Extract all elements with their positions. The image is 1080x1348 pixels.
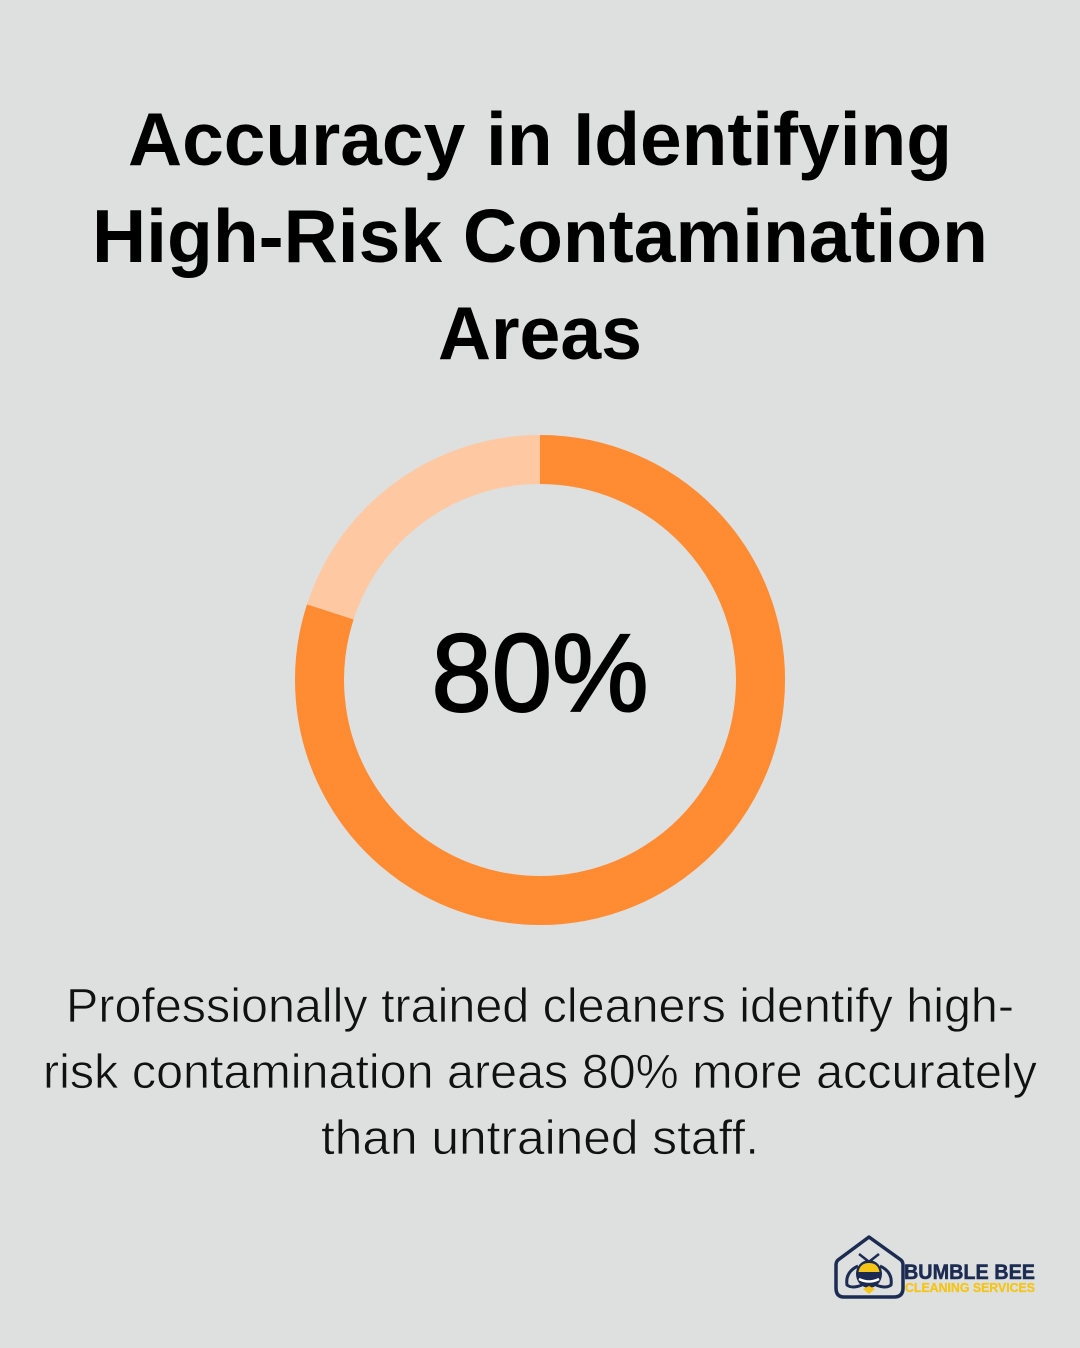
center value: 80% (432, 612, 648, 735)
logo: Bumble Bee Cleaning Services (836, 1237, 1035, 1297)
description (43, 980, 1037, 1165)
description: Professionally trained cleaners identify high- (66, 980, 1014, 1033)
description: than untrained staff. (321, 1112, 759, 1165)
remaining 20% segment (320, 460, 760, 900)
icon: house with bee (836, 1237, 903, 1297)
title: High-Risk Contamination (92, 194, 988, 278)
title (92, 97, 988, 375)
logo wordmark: BUMBLE BEE (904, 1261, 1035, 1284)
title: Accuracy in Identifying (128, 97, 952, 181)
donut chart: 80% (320, 460, 761, 901)
highlighted 80% segment (320, 460, 761, 901)
title: Areas (438, 291, 642, 375)
description: risk contamination areas 80% more accurately (43, 1046, 1037, 1099)
logo tagline: CLEANING SERVICES (905, 1281, 1035, 1295)
